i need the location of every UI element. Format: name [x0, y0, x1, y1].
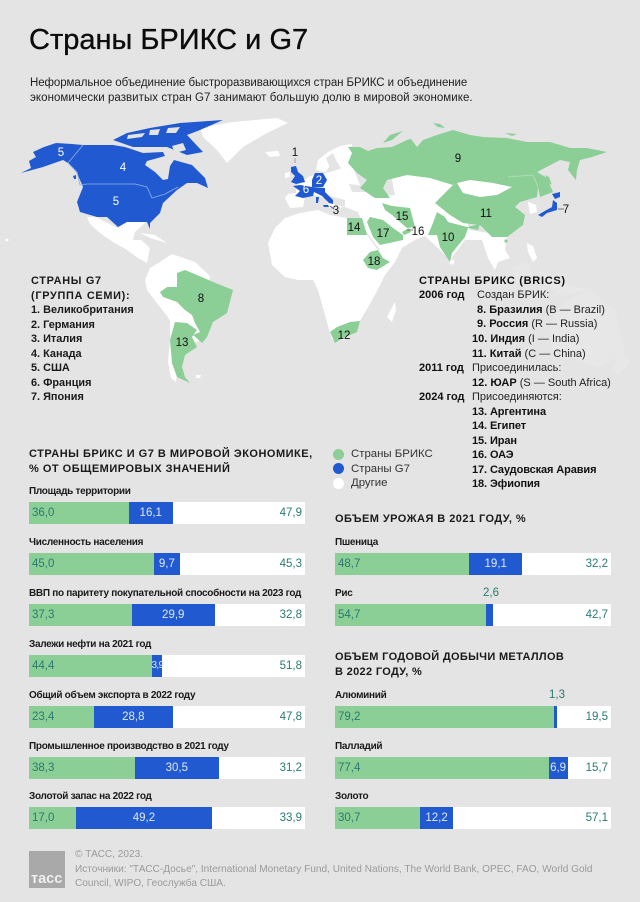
footer: sources: [75, 849, 592, 889]
legend: Страны G7: [351, 462, 410, 474]
panel: BRICS list: 10. Индия (I — India): [472, 332, 579, 344]
bar: gold reserve: 49,2: [133, 812, 155, 824]
panel: G7 list: 3. Италия: [31, 333, 82, 345]
bar: aluminium: 19,5: [586, 710, 608, 722]
bar: population: 9,7: [159, 558, 175, 570]
footer: sources: Источники: "ТАСС-Досье", International Monetary Fund, United Nations, The World Bank, OPEC, FAO, World Gold: [75, 864, 592, 875]
BRICS heading: СТРАНЫ БРИКС (BRICS): [419, 274, 566, 286]
bar: aluminium: [335, 688, 611, 728]
bar: industry: [29, 740, 305, 779]
map labels: 3: [333, 205, 339, 217]
bar: rice: 42,7: [586, 609, 608, 621]
panel: BRICS list: 13. Аргентина: [472, 406, 546, 418]
bar: population: 45,0: [32, 558, 54, 570]
bar: rice: [335, 587, 611, 626]
map labels: 4: [120, 162, 127, 174]
panel: G7 list: 2. Германия: [31, 319, 95, 331]
bar: export: 28,8: [122, 711, 145, 723]
bar: wheat: 19,1: [485, 558, 507, 570]
heading: world economy: СТРАНЫ БРИКС И G7 В МИРОВОЙ ЭКОНОМИКЕ,: [29, 448, 313, 460]
map labels: 7: [563, 204, 569, 216]
borders: [68, 145, 178, 198]
bar: wheat: [335, 537, 611, 575]
bar: palladium: 6,9: [550, 762, 566, 774]
panel: BRICS list: 8. Бразилия (B — Brazil): [477, 304, 605, 316]
bar: gold: Золото: [335, 791, 368, 802]
title: Страны БРИКС и G7: [29, 24, 308, 56]
bar: export: Общий объем экспорта в 2022 году: [29, 690, 195, 701]
Egypt: [347, 218, 367, 235]
bar: population: [29, 537, 305, 575]
Argentina: [170, 322, 197, 383]
bar: territory: 47,9: [280, 507, 302, 519]
countries: BRICS: [160, 123, 607, 383]
Brazil: [160, 270, 233, 343]
footer: sources: Council, WIPO, Геослужба США.: [75, 878, 226, 889]
bar: aluminium: Алюминий: [335, 690, 386, 700]
bar: GDP: [29, 588, 305, 626]
bar: territory: 16,1: [140, 507, 162, 519]
bar: export: [29, 690, 305, 728]
panel: BRICS list: 15. Иран: [472, 435, 517, 447]
bar: rice: 2,6: [483, 587, 499, 599]
Russia: [348, 130, 607, 198]
Ethiopia: [363, 250, 390, 270]
bar: wheat: Пшеница: [335, 537, 378, 548]
heading: metals: В 2022 ГОДУ, %: [335, 666, 422, 678]
panel: BRICS list: [419, 274, 611, 490]
panel: BRICS list: Создан БРИК:: [477, 289, 549, 301]
bar: gold reserve: Золотой запас на 2022 год: [29, 791, 152, 802]
map labels: 17: [377, 228, 389, 240]
bar: oil: 44,4: [32, 660, 54, 672]
footer: sources: © ТАСС, 2023.: [75, 849, 143, 860]
South Africa: [330, 321, 360, 343]
bar: gold: 12,2: [425, 812, 448, 824]
panel: G7 list: 6. Франция: [31, 377, 91, 389]
countries: Europe G7: [291, 166, 333, 207]
panel: BRICS list: Присоединилась:: [472, 362, 561, 374]
Mongolia: [457, 180, 512, 197]
bar: oil: 3,9: [152, 660, 163, 671]
intro text: экономически развитых стран G7 занимают большую долю в мировой экономике.: [30, 92, 473, 104]
bar: territory: [29, 486, 305, 524]
Russian islands: [383, 131, 403, 143]
bar: industry: 31,2: [280, 762, 302, 774]
bar: gold reserve: [29, 791, 305, 829]
faint southeast asia and oceania: [488, 262, 630, 375]
seas: [147, 153, 394, 207]
countries: USA and Canada: [21, 120, 223, 229]
heading: world economy: % ОТ ОБЩЕМИРОВЫХ ЗНАЧЕНИЙ: [29, 463, 230, 475]
map labels: 6: [303, 184, 309, 196]
bar: territory: Площадь территории: [29, 486, 131, 497]
bar: industry: 38,3: [32, 762, 54, 774]
bar: wheat: 48,7: [338, 558, 360, 570]
legend: Страны БРИКС: [351, 448, 433, 460]
bar: palladium: 77,4: [338, 762, 360, 774]
Saudi Arabia: [367, 217, 403, 245]
bar: GDP: 37,3: [32, 609, 54, 621]
bar: export: 47,8: [280, 711, 302, 723]
map labels: 9: [455, 153, 461, 165]
BRICS 2011: 2011 год: [419, 362, 464, 374]
map labels: 1: [292, 147, 298, 159]
icon: TASS logo: [29, 851, 65, 888]
bar: gold reserve: 33,9: [280, 812, 302, 824]
map labels: 2: [316, 175, 322, 187]
China: [435, 175, 538, 237]
heading: world economy: [29, 447, 313, 475]
bar: oil: Залежи нефти на 2021 год: [29, 639, 151, 650]
intro text: Неформальное объединение быстроразвивающихся стран БРИКС и объединение: [30, 77, 467, 89]
map labels: 13: [176, 337, 188, 349]
bar: industry: Промышленное производство в 2021 году: [29, 740, 229, 752]
panel: G7 list: [31, 275, 134, 403]
panel: BRICS list: 16. ОАЭ: [472, 449, 513, 461]
icon: TASS logo: тасс: [31, 871, 62, 887]
bar: gold: [335, 791, 611, 829]
bar: wheat: 32,2: [586, 558, 608, 570]
bar: palladium: Палладий: [335, 740, 382, 752]
countries: Japan: [538, 192, 560, 217]
legend: [333, 448, 433, 489]
bar: territory: 36,0: [32, 507, 54, 519]
UAE: [402, 228, 411, 235]
intro text: [30, 76, 473, 104]
panel: G7 list: 4. Канада: [31, 348, 82, 360]
heading: harvest: ОБЪЕМ УРОЖАЯ В 2021 ГОДУ, %: [335, 513, 526, 525]
bar: oil: 51,8: [280, 660, 302, 672]
bar: industry: 30,5: [166, 762, 188, 774]
panel: BRICS list: 14. Египет: [472, 420, 526, 432]
map labels: 16: [412, 226, 424, 238]
panel: G7 list: 1. Великобритания: [31, 304, 134, 316]
map labels: 14: [348, 222, 361, 234]
bar: GDP: ВВП по паритету покупательной способности на 2023 год: [29, 588, 301, 599]
map labels: 10: [442, 232, 454, 244]
heading: metals: [335, 650, 564, 678]
heading: metals: ОБЪЕМ ГОДОВОЙ ДОБЫЧИ МЕТАЛЛОВ: [335, 651, 564, 663]
India: [428, 212, 480, 262]
panel: G7 list: 7. Япония: [31, 391, 84, 403]
bar: GDP: 29,9: [162, 609, 184, 621]
bar: population: 45,3: [280, 558, 302, 570]
panel: BRICS list: 9. Россия (R — Russia): [477, 318, 597, 330]
panel: G7 list: 5. США: [31, 362, 70, 374]
panel: G7 list: (ГРУППА СЕМИ):: [31, 290, 130, 302]
Iran: [382, 203, 415, 228]
panel: G7 list: СТРАНЫ G7: [31, 275, 102, 287]
bar: export: 23,4: [32, 711, 54, 723]
bar: gold: 30,7: [338, 812, 360, 824]
panel: BRICS list: Присоединяются:: [472, 391, 562, 403]
panel: BRICS list: 18. Эфиопия: [472, 478, 540, 490]
panel: BRICS list: 17. Саудовская Аравия: [472, 464, 596, 476]
panel: BRICS list: 11. Китай (C — China): [472, 348, 586, 360]
bar: palladium: 15,7: [586, 762, 608, 774]
bar: population: Численность населения: [29, 537, 143, 548]
map labels: 11: [480, 208, 492, 220]
bar: rice: Рис: [335, 588, 352, 599]
bar: aluminium: 79,2: [338, 710, 360, 722]
bar: oil: [29, 639, 305, 677]
BRICS 2006: 2006 год: [419, 289, 465, 301]
map labels: 5: [113, 196, 119, 208]
panel: BRICS list: 12. ЮАР (S — South Africa): [472, 376, 611, 388]
bar: rice: 54,7: [338, 609, 360, 621]
map: [6, 118, 607, 383]
bar: GDP: 32,8: [280, 609, 302, 621]
bar: palladium: [335, 740, 611, 779]
landmass: other countries: [6, 118, 537, 382]
map labels: 15: [396, 211, 408, 223]
map labels: 18: [368, 256, 380, 268]
legend: Другие: [351, 477, 387, 489]
bar: aluminium: 1,3: [549, 688, 565, 700]
map labels: 5: [58, 147, 64, 159]
map labels: 12: [338, 330, 350, 342]
BRICS 2024: 2024 год: [419, 391, 465, 403]
bar: gold: 57,1: [586, 812, 608, 824]
map labels: [58, 147, 569, 349]
seas on north america: [127, 127, 186, 153]
bar: gold reserve: 17,0: [32, 812, 54, 824]
map labels: 8: [198, 293, 204, 305]
